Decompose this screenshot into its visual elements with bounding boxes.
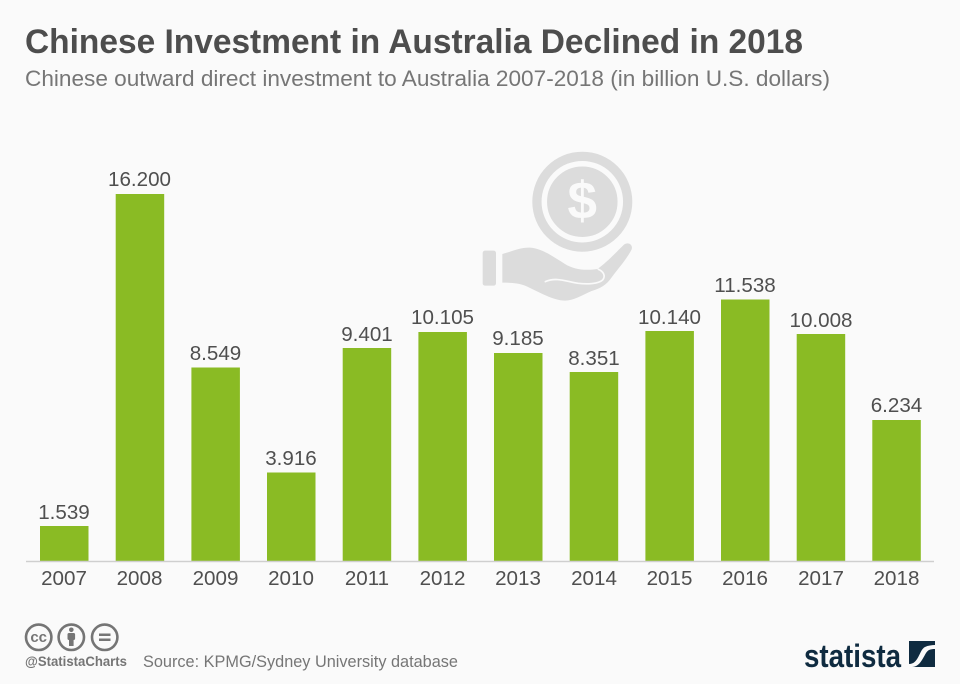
- bar 2010: [265, 447, 317, 590]
- credit handle: @StatistaCharts: [25, 654, 127, 669]
- bar 2008: [108, 168, 171, 590]
- subtitle: Chinese outward direct investment to Australia 2007-2018 (in billion U.S. dollars): [25, 66, 830, 91]
- bar 2009: 8.549: [190, 342, 241, 365]
- bar 2007: [38, 501, 90, 590]
- icon: creative commons licence: [26, 625, 117, 650]
- bar 2012: 10.105: [411, 306, 474, 329]
- bar 2013: [492, 327, 544, 590]
- icon: hand: [483, 243, 632, 301]
- logo wordmark: statista: [804, 638, 901, 674]
- icon: coin: $: [568, 172, 597, 230]
- icon: hand holding dollar coin: [483, 152, 632, 301]
- bar 2017: 10.008: [790, 309, 852, 332]
- icon: no derivatives: [92, 625, 117, 650]
- bar 2007: 2007: [41, 567, 87, 590]
- bar 2015: 2015: [647, 567, 692, 590]
- bar 2012: [411, 306, 474, 590]
- bar 2011: 2011: [345, 567, 389, 590]
- bar 2007: 1.539: [38, 501, 90, 524]
- title: Chinese Investment in Australia Declined in 2018: [25, 23, 803, 61]
- bar 2017: [790, 309, 852, 590]
- bar 2010: 3.916: [265, 447, 317, 470]
- bar 2012: 2012: [420, 567, 465, 590]
- bar 2009: [190, 342, 241, 590]
- bar 2018: 2018: [874, 567, 919, 590]
- icon: attribution: [59, 625, 84, 650]
- bar 2009: 2009: [193, 567, 238, 590]
- bar 2014: 8.351: [568, 347, 620, 370]
- icon: coin: [532, 152, 632, 252]
- logo mark: [909, 641, 935, 667]
- bar 2010: 2010: [268, 567, 314, 590]
- logo: statista: [804, 638, 935, 674]
- bar 2014: [568, 347, 620, 590]
- bar 2016: 2016: [722, 567, 768, 590]
- bar 2011: [341, 323, 393, 590]
- bar 2018: 6.234: [871, 394, 922, 417]
- bar 2013: 2013: [495, 567, 541, 590]
- bar 2015: [638, 306, 701, 590]
- bar 2015: 10.140: [638, 306, 701, 329]
- bar 2016: [714, 274, 776, 590]
- icon: cc: cc: [30, 629, 47, 646]
- bar 2017: 2017: [798, 567, 844, 590]
- source: Source: KPMG/Sydney University database: [143, 653, 458, 671]
- bar 2011: 9.401: [341, 323, 393, 346]
- bar 2014: 2014: [571, 567, 617, 590]
- bar 2016: 11.538: [714, 274, 776, 297]
- bar 2018: [871, 394, 922, 590]
- bar 2008: 2008: [117, 567, 162, 590]
- bar chart: [26, 168, 934, 590]
- bar 2008: 16.200: [108, 168, 171, 191]
- bar 2013: 9.185: [492, 327, 544, 350]
